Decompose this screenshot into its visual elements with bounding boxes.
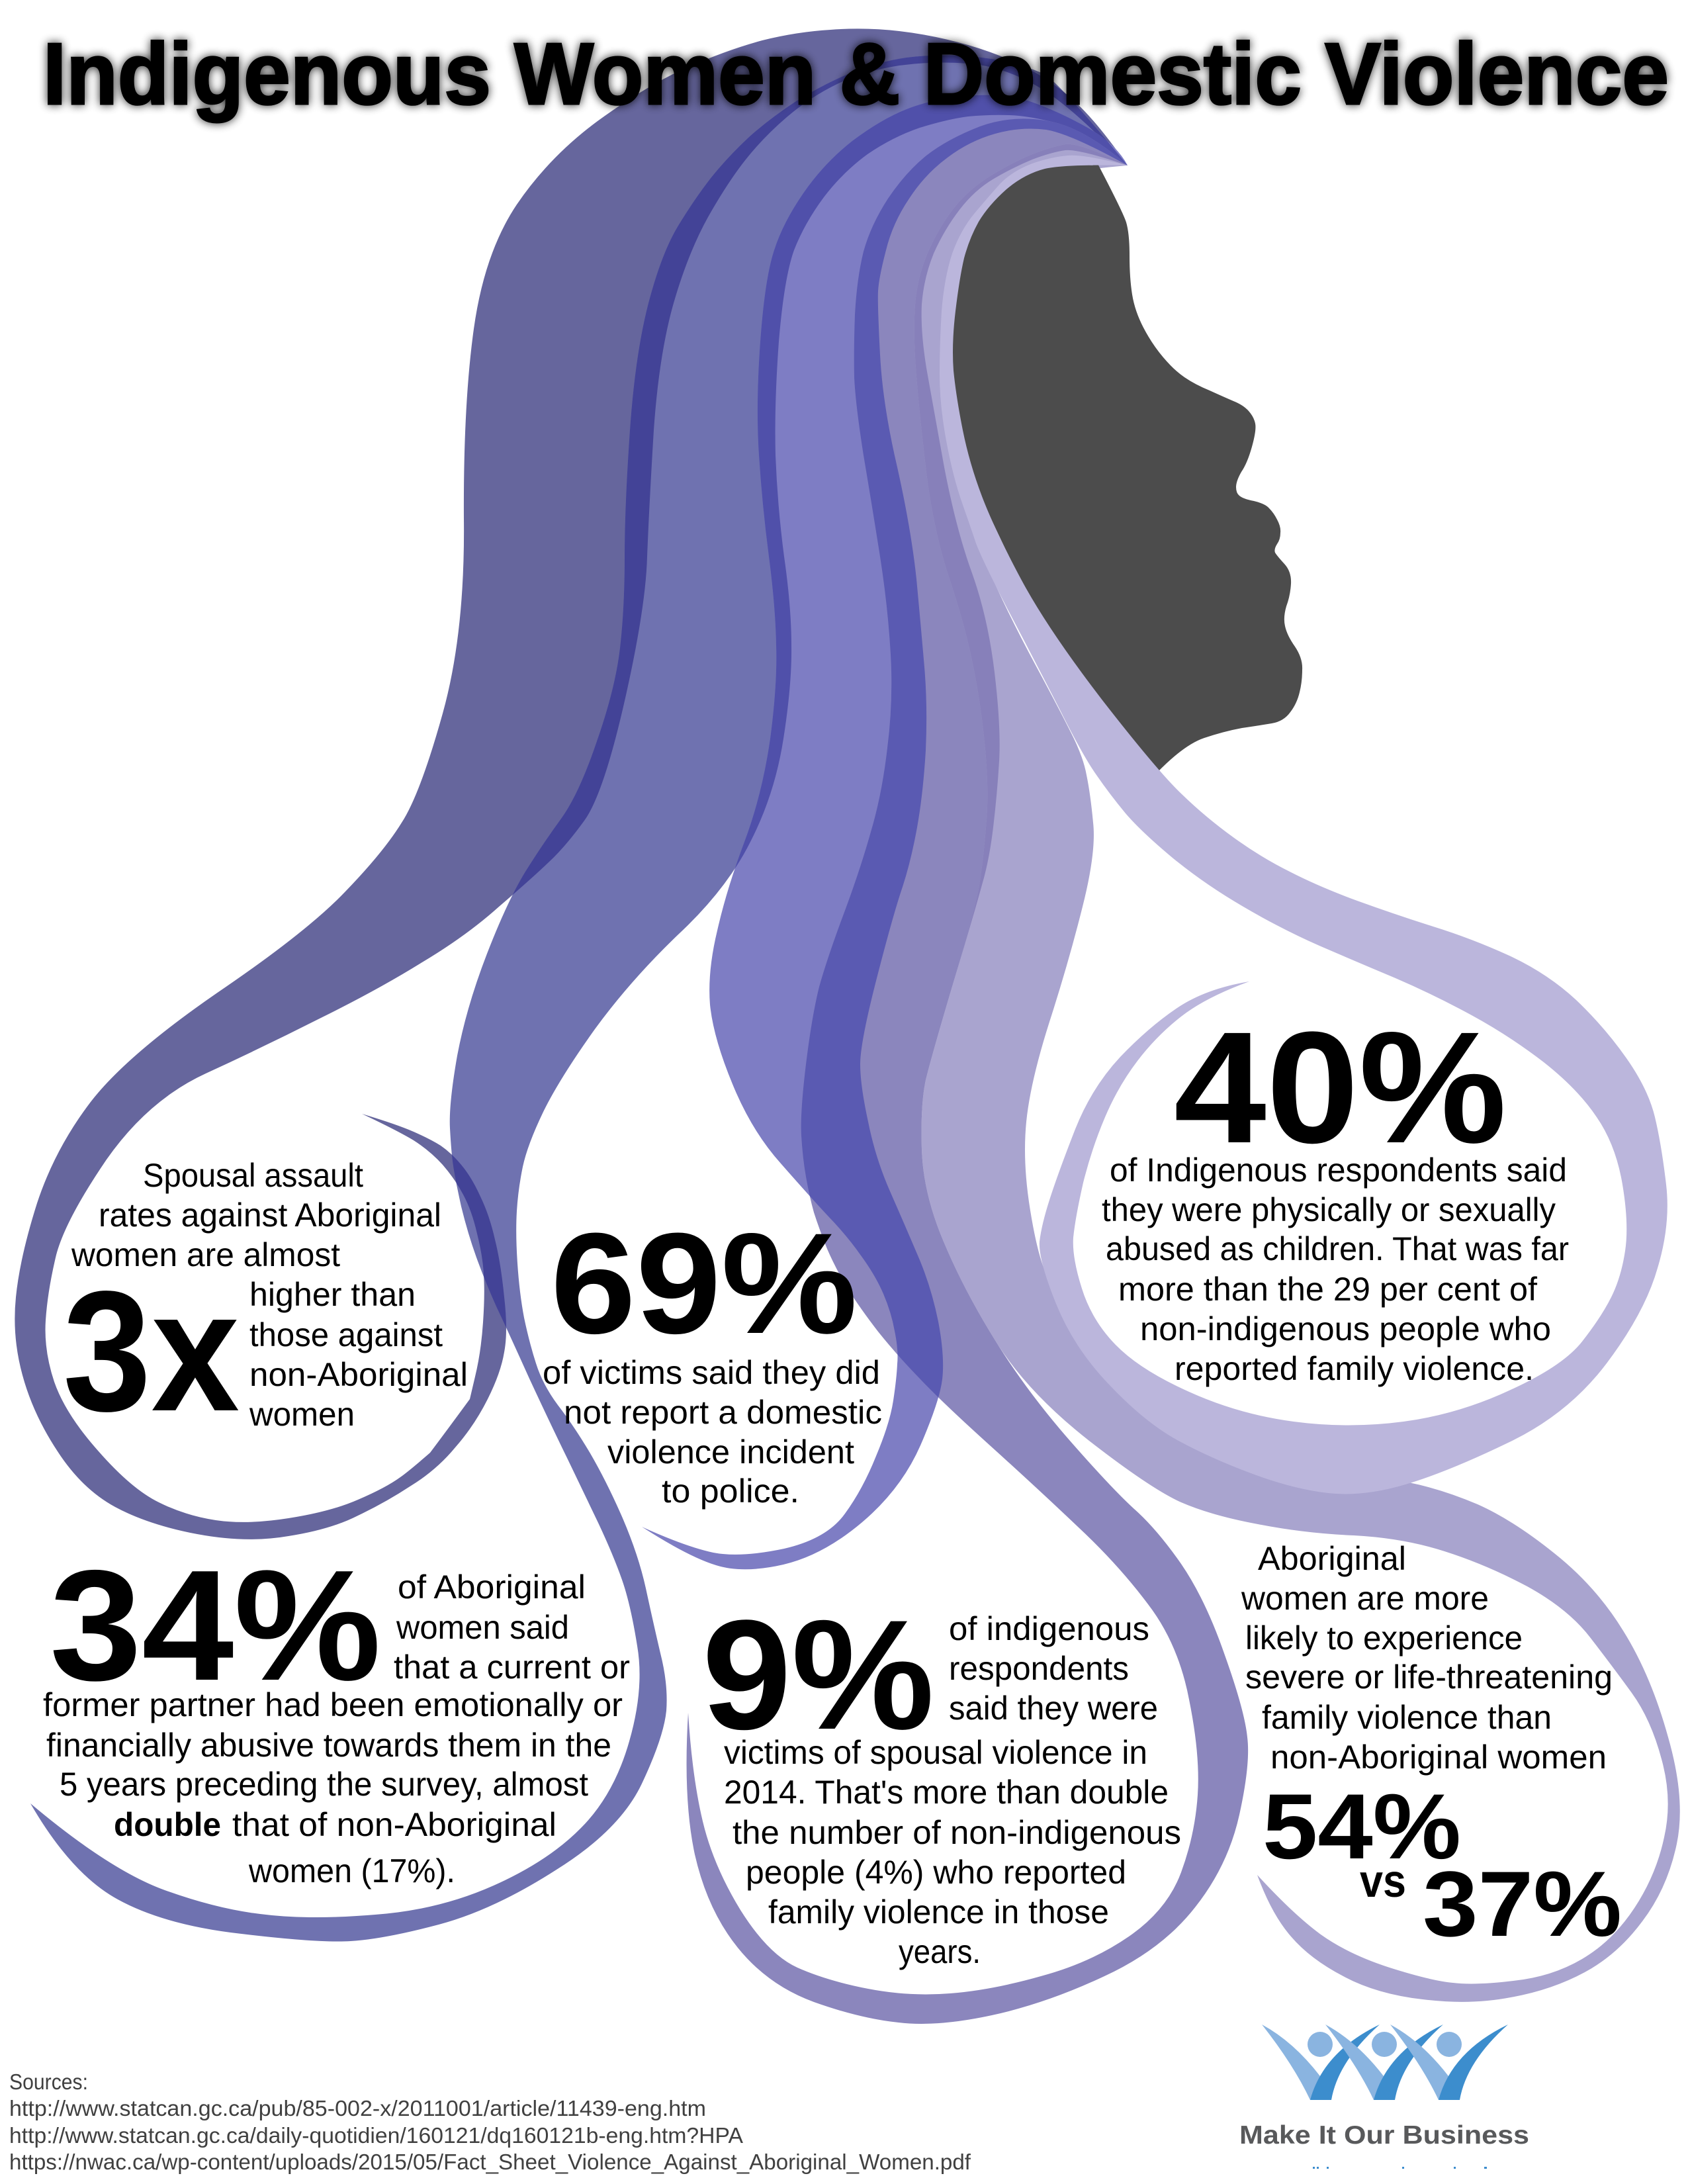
body text: of victims said they did — [543, 1354, 880, 1391]
panel: 34% emotionally or financially abusive — [43, 1538, 630, 1889]
logo: Make It Our Business — [1239, 2025, 1529, 2169]
cut-off blue url marks — [1313, 2167, 1487, 2169]
overlap of ribbons 3 and 4 — [801, 118, 1127, 1398]
body text: non-Aboriginal women — [1270, 1739, 1607, 1776]
body text: non-indigenous people who — [1140, 1310, 1551, 1347]
body text: former partner had been emotionally or — [43, 1686, 623, 1723]
body text: family violence than — [1262, 1699, 1552, 1736]
body text: violence incident — [607, 1433, 854, 1471]
body text: to police. — [662, 1473, 799, 1510]
body text: family violence in those — [768, 1893, 1109, 1931]
intro text: women are almost — [71, 1236, 340, 1273]
sources: http://www.statcan.gc.ca/pub/85-002-x/2011001/article/11439-eng.htm — [9, 2096, 706, 2120]
big number 40%: 40% — [1174, 999, 1507, 1176]
intro text: rates against Aboriginal — [99, 1197, 441, 1234]
side text: women — [249, 1396, 355, 1433]
panel: 40% abused as children — [1102, 999, 1569, 1387]
panel: 54% vs 37% — [1241, 1540, 1622, 1956]
body text: 2014. That's more than double — [724, 1774, 1169, 1811]
sources — [9, 2070, 971, 2174]
body text: the number of non-indigenous — [733, 1814, 1181, 1851]
overlap of ribbons 1 and 2 — [451, 56, 1107, 1328]
panel: spousal assault 3x — [63, 1157, 468, 1447]
body text: they were physically or sexually — [1102, 1191, 1556, 1228]
overlap of ribbons 2 and 3 — [734, 95, 1128, 868]
ribbon 6: lightest, wraps the 40% bubble — [940, 156, 1667, 1494]
body text — [543, 1354, 882, 1510]
body text: severe or life-threatening — [1245, 1659, 1613, 1696]
panel: 69% did not report — [543, 1203, 882, 1510]
body text — [43, 1686, 623, 1889]
sources: https://nwac.ca/wp-content/uploads/2015/05/Fact_Sheet_Violence_Against_Aboriginal_Women.pdf — [9, 2150, 971, 2174]
big number 69%: 69% — [551, 1203, 858, 1363]
body text: that of non-Aboriginal — [232, 1806, 556, 1843]
ribbon 2: wraps the 34% bubble — [30, 55, 1128, 1942]
side text: said they were — [949, 1690, 1158, 1727]
body text: more than the 29 per cent of — [1118, 1271, 1537, 1308]
intro text — [71, 1157, 441, 1273]
overlap of ribbons 4 and 5 — [914, 144, 1128, 1347]
body text: years. — [899, 1933, 981, 1970]
logo wordmark: Make It Our Business — [1239, 2121, 1529, 2150]
body text — [1102, 1152, 1569, 1387]
big number 34%: 34% — [50, 1538, 381, 1713]
body text: victims of spousal violence in — [724, 1734, 1147, 1771]
body text: Aboriginal — [1258, 1540, 1406, 1577]
side text — [949, 1610, 1158, 1727]
body text: abused as children. That was far — [1106, 1230, 1569, 1267]
ribbon 3: wraps the 69% bubble — [642, 95, 1128, 1569]
body text: people (4%) who reported — [746, 1854, 1126, 1891]
side text: that a current or — [394, 1649, 630, 1686]
body text: financially abusive towards them in the — [46, 1727, 611, 1764]
big number 3x: 3x — [63, 1255, 241, 1447]
body text: double — [114, 1806, 221, 1843]
side text — [394, 1569, 630, 1686]
side text — [249, 1276, 468, 1433]
body text: not report a domestic — [564, 1394, 882, 1431]
body text — [1241, 1540, 1613, 1776]
body text: likely to experience — [1245, 1619, 1523, 1657]
panel: 9% spousal violence — [702, 1588, 1181, 1970]
side text: women said — [396, 1609, 569, 1646]
body text: reported family violence. — [1175, 1350, 1534, 1387]
ribbon 5: wraps the 54% vs 37% bubble — [914, 144, 1680, 2002]
side text: those against — [249, 1316, 443, 1353]
side text: higher than — [249, 1276, 416, 1313]
sources: http://www.statcan.gc.ca/daily-quotidien/160121/dq160121b-eng.htm?HPA — [9, 2123, 743, 2148]
big number 54%: 54% — [1263, 1774, 1461, 1878]
side text: of Aboriginal — [398, 1569, 586, 1606]
body text: women are more — [1241, 1580, 1489, 1617]
side text: respondents — [949, 1650, 1129, 1687]
body text: 5 years preceding the survey, almost — [60, 1766, 588, 1803]
body text: women (17%). — [248, 1852, 455, 1889]
ribbon 1: darkest, wraps the 3x bubble — [15, 28, 1128, 1539]
intro text: Spousal assault — [143, 1157, 363, 1194]
sources: Sources: — [9, 2070, 88, 2094]
big number 37%: 37% — [1423, 1852, 1622, 1956]
body text: of Indigenous respondents said — [1110, 1152, 1567, 1189]
title: Indigenous Women & Domestic Violence — [43, 25, 1669, 122]
big number 9%: 9% — [702, 1588, 934, 1762]
vs label: vs — [1360, 1855, 1406, 1907]
face silhouette — [948, 159, 1302, 772]
ribbon 4: wraps the 9% bubble — [687, 118, 1248, 2024]
side text: of indigenous — [949, 1610, 1149, 1647]
icon: three raised-arm figures — [1262, 2025, 1508, 2100]
body text — [724, 1734, 1181, 1970]
side text: non-Aboriginal — [249, 1356, 468, 1393]
